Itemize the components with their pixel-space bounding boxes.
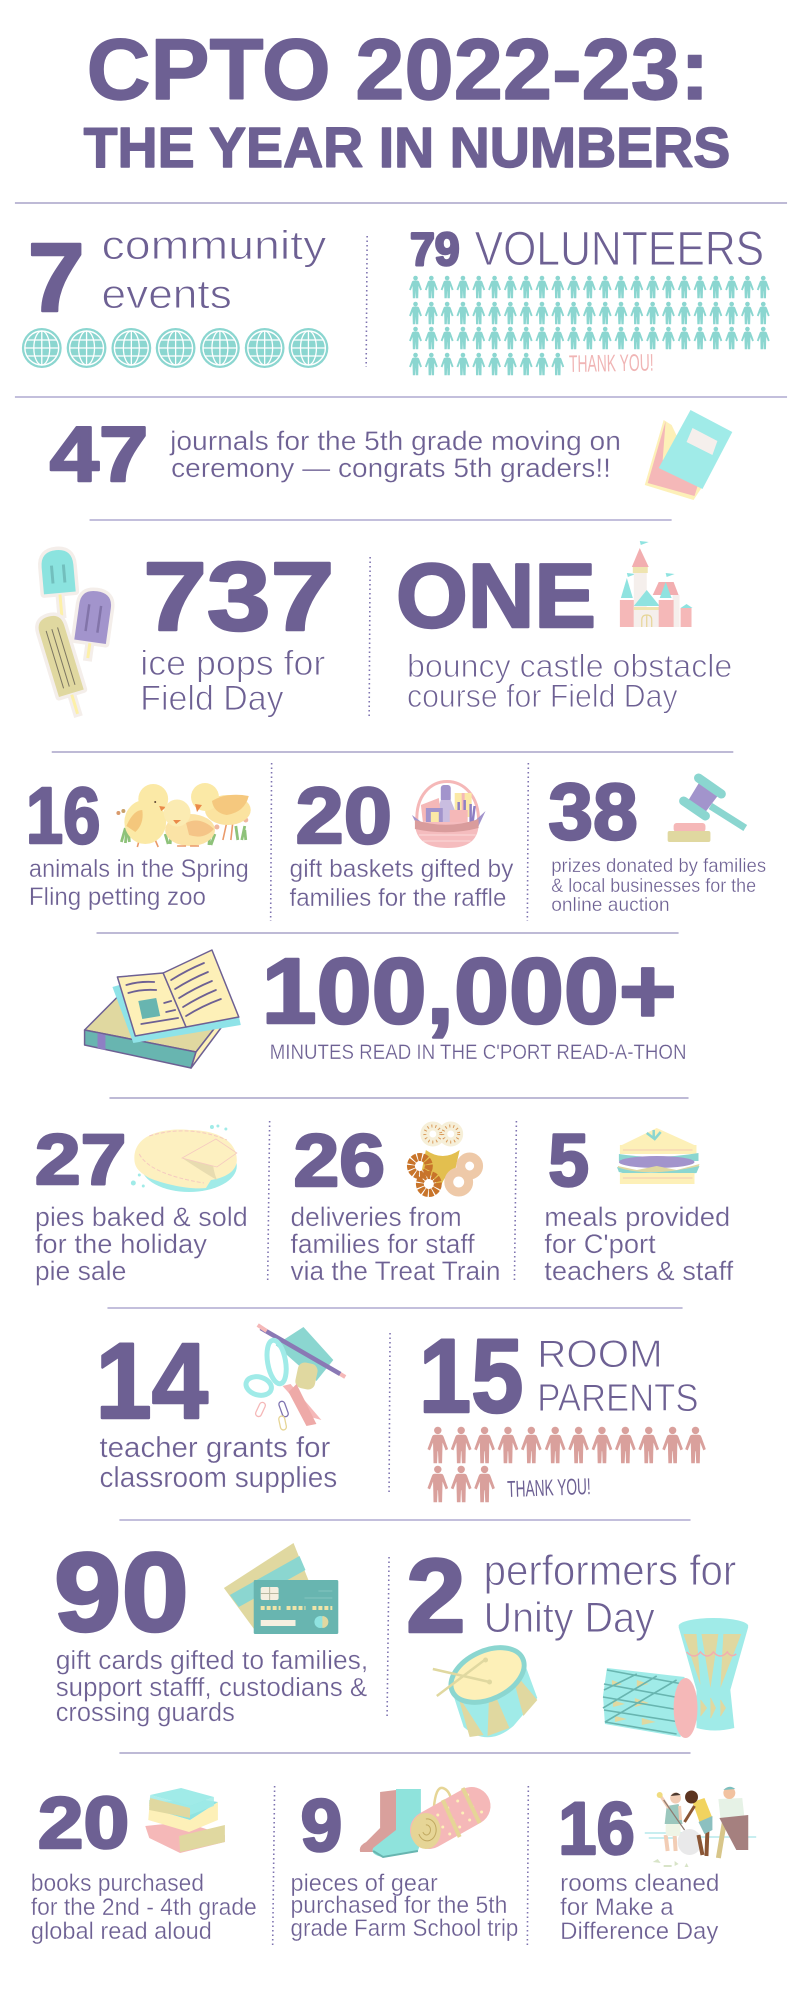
text: minutes read: MINUTES READ IN THE C'PORT READ-A-THON: [270, 1041, 687, 1064]
text: deliveries: via the Treat Train: [291, 1256, 500, 1286]
panel: 16 animals: [26, 771, 251, 911]
text: pies: pie sale: [35, 1256, 126, 1286]
icon: stack of books: [145, 1788, 225, 1853]
panel: 14 teacher grants: [96, 1320, 345, 1494]
panel: 27 pies: [35, 1121, 248, 1286]
icon: djembe drum: [679, 1618, 748, 1730]
icon: drum with sticks: [433, 1637, 537, 1737]
text: rooms cleaned: [560, 1870, 719, 1945]
text: gift cards: support stafff, custodians &: [56, 1674, 367, 1702]
text: gift cards: crossing guards: [56, 1699, 235, 1727]
icon: chicks: [116, 783, 251, 847]
text: prizes: prizes donated by families: [551, 856, 766, 877]
icon: castle: [620, 541, 693, 627]
stat: 5: 5: [548, 1119, 589, 1202]
heading: room parents: [537, 1333, 698, 1420]
text: deliveries: families for staff: [291, 1229, 475, 1259]
text: books: books purchased: [31, 1870, 204, 1897]
stat: 15: 15: [419, 1318, 523, 1435]
stat: 20: 20: [296, 771, 392, 860]
stat: 16: 16: [26, 771, 100, 860]
text: journals: ceremony — congrats 5th graders!!: [171, 453, 611, 483]
text: animals: Fling petting zoo: [29, 883, 206, 911]
panel: one bouncy castle: [396, 541, 732, 714]
text: community events: events: [101, 271, 232, 317]
stat: 16: 16: [558, 1787, 635, 1870]
note: thank you: THANK YOU!: [569, 349, 654, 378]
text: prizes: [551, 856, 766, 916]
heading: room parents: ROOM: [537, 1333, 663, 1376]
stat: 14: 14: [96, 1320, 208, 1441]
text: teacher grants: teacher grants for: [99, 1432, 331, 1464]
title: [84, 22, 730, 180]
text: teacher grants: classroom supplies: [99, 1462, 337, 1494]
text: gift baskets: [290, 855, 514, 912]
icon: gavel: [668, 778, 745, 842]
text: bouncy castle: course for Field Day: [407, 678, 678, 714]
icon: journals: [645, 410, 732, 500]
text: gift baskets: gift baskets gifted by: [290, 855, 514, 883]
text: prizes: online auction: [551, 895, 670, 916]
stat: 737: 737: [143, 542, 334, 651]
panel: 737 ice pops: [36, 542, 334, 719]
text: ice pops for field day: ice pops for: [140, 644, 326, 683]
icon: cleanup volunteers: [645, 1787, 756, 1867]
title: THE YEAR IN NUMBERS: [84, 117, 730, 180]
panel: 79 volunteers: [409, 223, 769, 378]
panel: 9 pieces of gear: [291, 1784, 518, 1942]
text: meals: [544, 1202, 734, 1286]
text: gift cards: gift cards gifted to families,: [56, 1647, 368, 1675]
stat: 47: 47: [50, 412, 148, 498]
panel: 20 books: [31, 1783, 257, 1945]
text: deliveries: [291, 1202, 500, 1286]
text: performers: Unity Day: [484, 1594, 655, 1642]
stat: 90: 90: [54, 1530, 189, 1655]
stat: 27: 27: [35, 1121, 126, 1200]
panel: 15 room parents: [419, 1318, 705, 1502]
heading: room parents: PARENTS: [537, 1377, 698, 1420]
panel: 20 gift baskets: [290, 771, 514, 912]
icon: gift basket: [412, 782, 486, 848]
stat: 79: 79: [410, 223, 460, 275]
stat: 7: 7: [28, 223, 85, 332]
panel: 5 meals: [544, 1119, 734, 1286]
icon: gift cards: [224, 1543, 338, 1634]
text: pies: pies baked & sold: [35, 1202, 248, 1232]
text: journals: journals for the 5th grade moving on: [169, 426, 621, 456]
text: rooms cleaned: Difference Day: [560, 1918, 718, 1945]
text: bouncy castle: [407, 648, 732, 714]
text: teacher grants: [99, 1432, 337, 1494]
text: meals: meals provided: [544, 1202, 730, 1232]
panel: 16 rooms cleaned: [558, 1787, 756, 1945]
text: meals: teachers & staff: [544, 1256, 734, 1286]
text: deliveries: deliveries from: [291, 1202, 462, 1232]
text: gear: grade Farm School trip: [291, 1915, 518, 1942]
text: performers: performers for: [484, 1547, 736, 1595]
icon: ice pops: [36, 549, 113, 719]
stat: one: ONE: [396, 546, 596, 647]
text: ice pops for field day: [140, 644, 326, 718]
text: gear: purchased for the 5th: [291, 1892, 507, 1919]
text: rooms cleaned: rooms cleaned: [560, 1870, 719, 1897]
icon: pretzels: [411, 1126, 479, 1193]
text: prizes: & local businesses for the: [551, 876, 756, 897]
text: animals: animals in the Spring: [29, 855, 249, 883]
panel: community events: [22, 222, 328, 368]
text: gift cards: [56, 1647, 368, 1727]
text: community events: community: [101, 222, 327, 268]
pictogram: 15 people: [428, 1427, 705, 1502]
stat: 9: 9: [300, 1784, 342, 1867]
panel: 100,000 minutes: [85, 939, 687, 1068]
panel: 47 journals: [50, 410, 732, 500]
text: rooms cleaned: for Make a: [560, 1894, 674, 1921]
text: gift baskets: families for the raffle: [290, 884, 506, 912]
text: books: global read aloud: [31, 1918, 212, 1945]
text: books: for the 2nd - 4th grade: [31, 1894, 257, 1921]
text: books: [31, 1870, 257, 1945]
icons: seven globes: [22, 328, 328, 368]
text: journals: [169, 426, 621, 483]
icon: boots and blanket: [360, 1788, 483, 1857]
stat: 38: 38: [548, 767, 638, 856]
icon: pie: [131, 1124, 237, 1192]
text: meals: for C'port: [544, 1229, 656, 1259]
text: pies: [35, 1202, 248, 1286]
text: animals: [29, 855, 249, 911]
pictogram: 79 people: [409, 276, 769, 375]
text: community events: [101, 222, 327, 317]
stat: 100,000+: 100,000+: [262, 939, 677, 1043]
icon: school supplies: [244, 1325, 345, 1430]
heading: volunteers: VOLUNTEERS: [475, 223, 764, 276]
text: gear: [291, 1870, 518, 1942]
panel: 90 gift cards: [54, 1530, 368, 1727]
icon: sandwich: [617, 1128, 699, 1184]
text: ice pops for field day: Field Day: [140, 679, 284, 718]
icon: open book on closed book: [85, 950, 241, 1068]
panel: 2 performers: [406, 1538, 748, 1738]
stat: 20: 20: [38, 1783, 129, 1864]
stat: 26: 26: [294, 1119, 385, 1202]
panel: 26 deliveries: [291, 1119, 500, 1286]
text: gear: pieces of gear: [291, 1870, 438, 1897]
text: performers: [484, 1547, 736, 1642]
panel: 38 prizes: [548, 767, 766, 916]
text: bouncy castle: bouncy castle obstacle: [407, 648, 732, 684]
note: thank you: THANK YOU!: [507, 1473, 591, 1502]
text: pies: for the holiday: [35, 1229, 207, 1259]
icon: side drum: [603, 1668, 697, 1738]
title: CPTO 2022-23:: [87, 22, 709, 118]
stat: 2: 2: [406, 1538, 466, 1655]
